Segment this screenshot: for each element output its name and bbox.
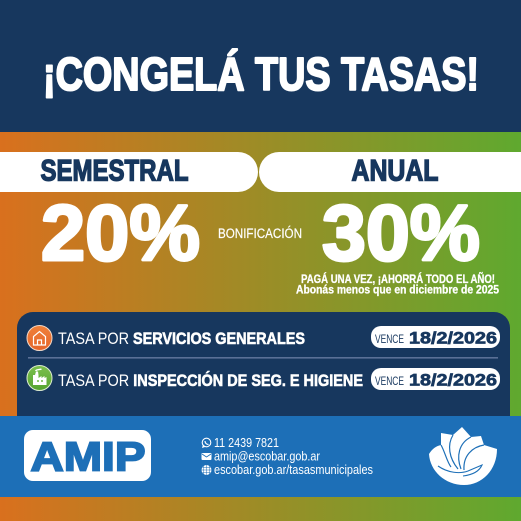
date pill: servicios generales xyxy=(371,326,500,348)
note: pay less: Abonás menos que en diciembre de 2025 xyxy=(296,284,500,296)
heading: semestral: SEMESTRAL xyxy=(40,154,188,188)
icon: globe xyxy=(202,465,212,475)
row text: inspección: TASA POR INSPECCIÓN DE SEG. E HIGIENE xyxy=(58,371,363,390)
contact details xyxy=(202,436,373,477)
website: escobar.gob.ar/tasasmunicipales xyxy=(214,463,373,477)
icon: mail xyxy=(202,453,212,460)
heading: anual: ANUAL xyxy=(352,154,438,188)
date pill: inspección: 18/2/2026 xyxy=(409,370,497,390)
pill: semestral xyxy=(0,152,258,192)
header band xyxy=(0,0,521,132)
icon: whatsapp xyxy=(202,438,211,448)
date pill: inspección: VENCE xyxy=(375,374,404,388)
label: bonificación: BONIFICACIÓN xyxy=(218,226,302,241)
logo: lotus in hand xyxy=(429,427,497,485)
phone: 11 2439 7821 xyxy=(214,436,279,450)
icon: factory xyxy=(27,366,52,390)
date pill: servicios generales: 18/2/2026 xyxy=(409,328,497,348)
panel: tasas xyxy=(17,312,510,416)
gradient background xyxy=(0,132,521,521)
panel background xyxy=(17,312,510,416)
date pill: inspección xyxy=(371,368,500,390)
pill: anual xyxy=(259,152,521,192)
date pill: servicios generales: VENCE xyxy=(375,332,404,346)
footer band xyxy=(0,416,521,497)
discount: 30%: 30% xyxy=(322,188,480,277)
panel: anual xyxy=(259,152,521,296)
logo: AMIP: AMIP xyxy=(30,434,146,480)
panel: semestral xyxy=(0,152,258,277)
email: amip@escobar.gob.ar xyxy=(214,450,320,464)
row text: servicios generales: TASA POR SERVICIOS GENERALES xyxy=(58,330,305,348)
discount: 20%: 20% xyxy=(41,188,200,277)
icon: house xyxy=(27,326,52,350)
